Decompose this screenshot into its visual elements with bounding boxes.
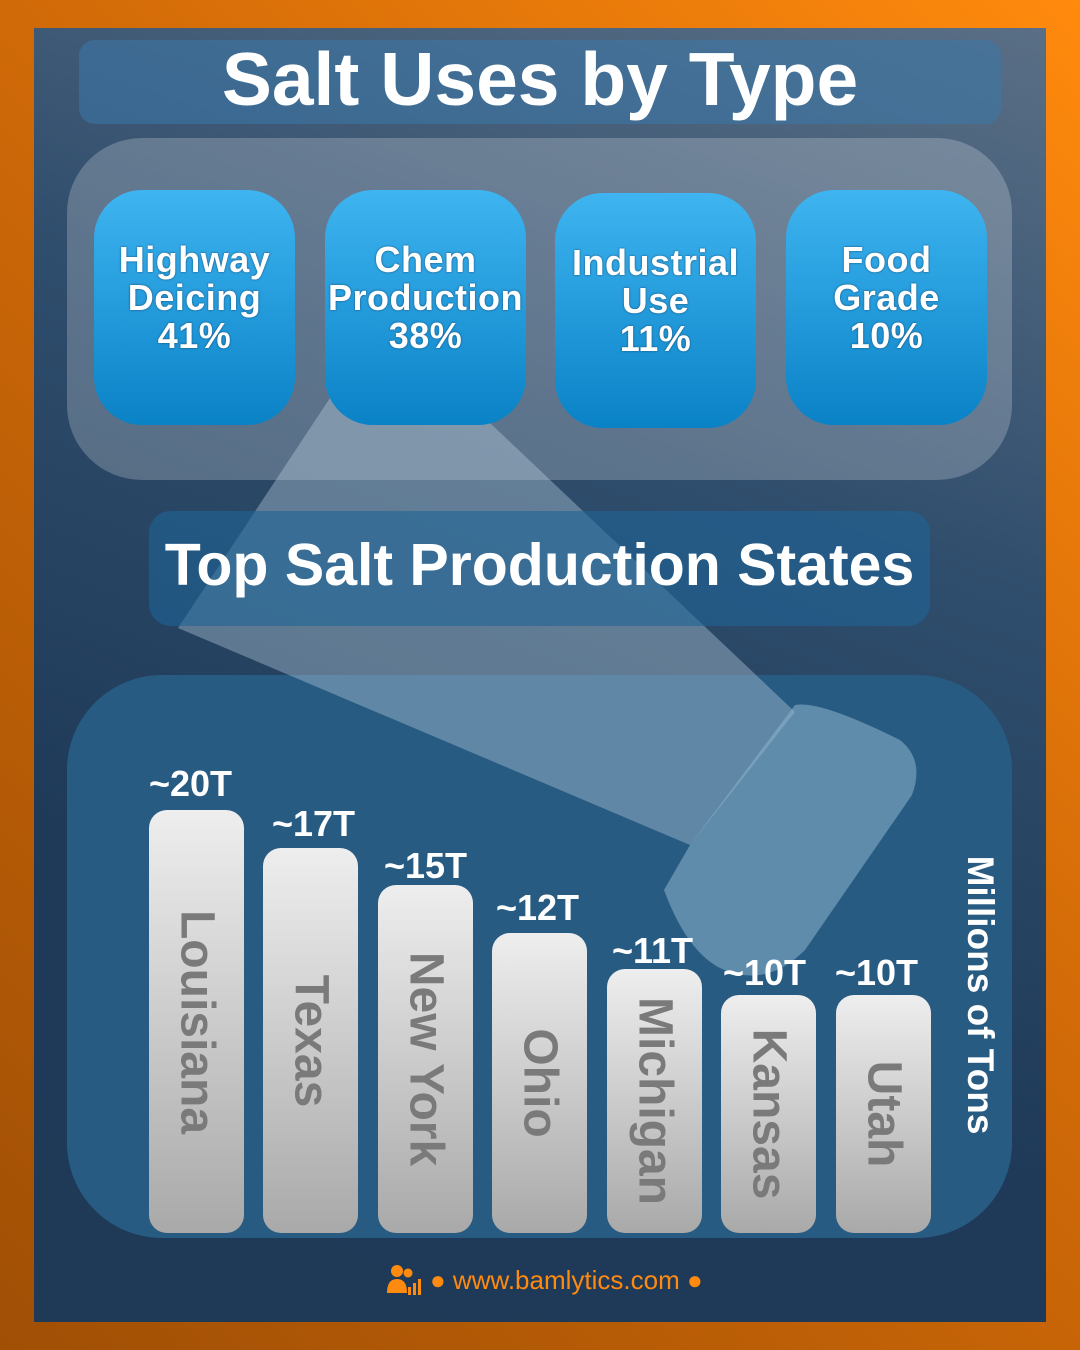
icon: users chart — [387, 1265, 421, 1295]
bar chart: ~20T — [149, 763, 232, 804]
box: chem production — [325, 190, 526, 425]
bar chart: ~10T — [835, 952, 918, 993]
box: highway deicing: Highway — [119, 238, 270, 280]
title — [79, 40, 1001, 124]
box: chem production: 38% — [389, 314, 462, 356]
box: industrial use: 11% — [620, 318, 691, 358]
bar chart: ~15T — [384, 845, 467, 886]
box: industrial use: Use — [622, 280, 689, 320]
box: food grade — [786, 190, 987, 425]
bar chart: Ohio — [513, 1028, 566, 1138]
bar chart: ~17T — [272, 803, 355, 844]
bar chart: Utah — [857, 1061, 910, 1167]
bar chart: ~10T — [723, 952, 806, 993]
bar chart: Kansas — [742, 1029, 795, 1199]
box: industrial use: Industrial — [572, 242, 739, 282]
bar chart: ~12T — [496, 887, 579, 928]
box: industrial use — [555, 193, 756, 428]
box: chem production: Production — [328, 276, 523, 318]
axis label: Millions of Tons — [960, 856, 1001, 1134]
box: food grade: Grade — [833, 276, 940, 318]
footer: ● www.bamlytics.com ● — [430, 1264, 703, 1294]
bar chart: Michigan — [628, 997, 681, 1205]
bar chart: New York — [399, 952, 452, 1166]
box: chem production: Chem — [374, 238, 476, 280]
subtitle — [149, 511, 930, 626]
box: highway deicing — [94, 190, 295, 425]
panel: states container — [67, 675, 1012, 1238]
subtitle: Top Salt Production States — [165, 532, 914, 598]
bar chart: Texas — [284, 974, 337, 1107]
box: highway deicing: 41% — [158, 314, 231, 356]
box: food grade: 10% — [850, 314, 923, 356]
box: food grade: Food — [842, 238, 931, 280]
panel: uses container — [67, 138, 1012, 480]
bar chart: Louisiana — [170, 909, 223, 1134]
title: Salt Uses by Type — [222, 37, 858, 121]
box: highway deicing: Deicing — [128, 276, 261, 318]
bar chart: ~11T — [612, 930, 693, 971]
